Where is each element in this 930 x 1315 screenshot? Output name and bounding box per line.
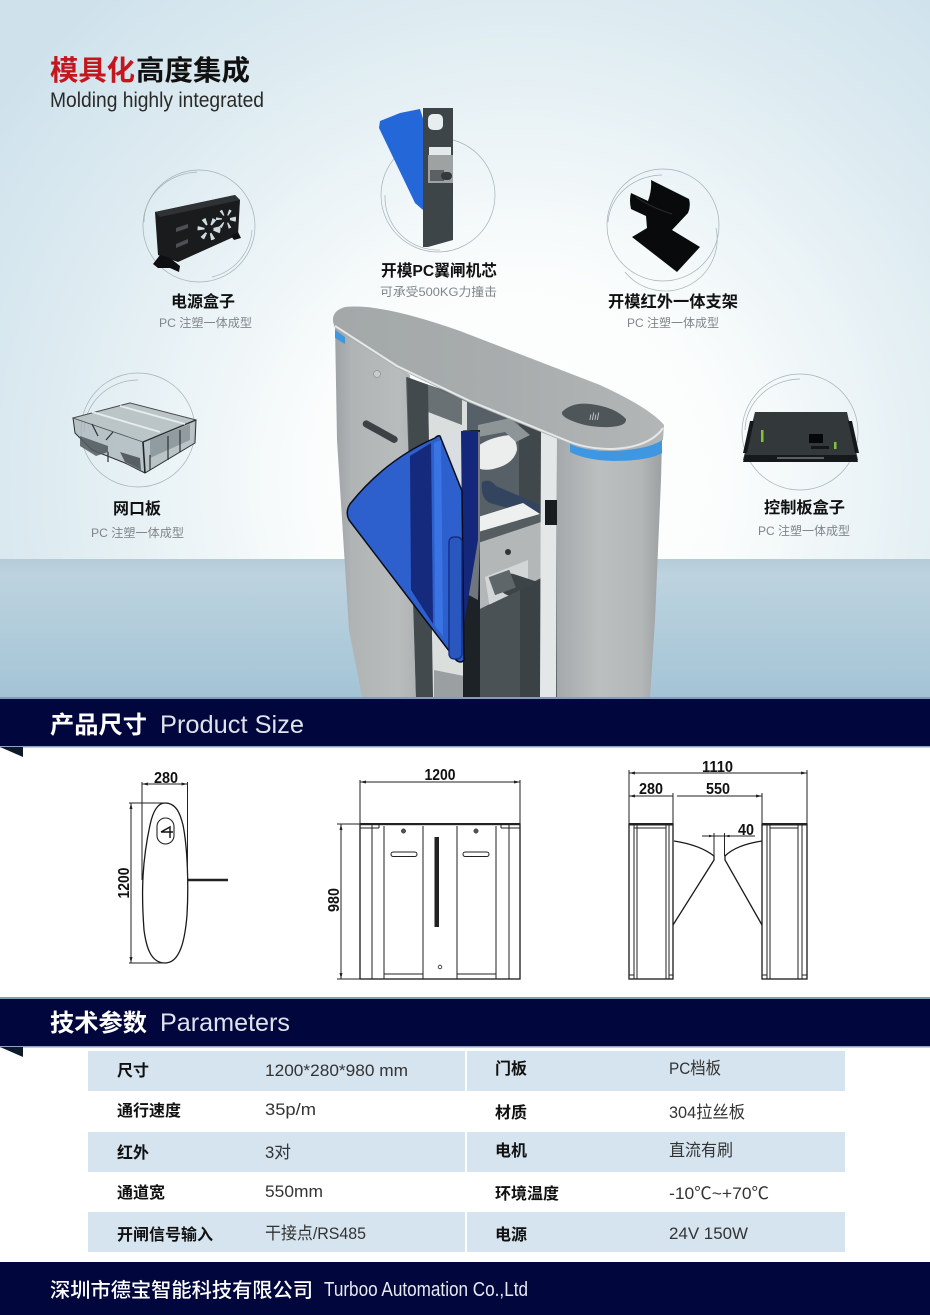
body screw (374, 370, 380, 378)
navy overlay on bar (461, 431, 478, 630)
table: parameters (88, 1051, 845, 1252)
icon: power box circle (143, 170, 255, 282)
heading: product size (50, 711, 304, 739)
label: network board (91, 500, 184, 540)
icon: power box (153, 195, 241, 272)
row: speed (117, 1100, 745, 1122)
translucent wing top (440, 430, 480, 600)
row: infrared: 3对 (265, 1143, 291, 1162)
row: size: 1200*280*980 mm (265, 1061, 408, 1080)
row: infrared: 电机 (495, 1142, 527, 1160)
upper strut (478, 418, 530, 442)
blue light strip left (335, 330, 345, 344)
reader panel (562, 404, 626, 427)
heading: parameters: 技术参数 (50, 1009, 147, 1037)
label: control box: 控制板盒子 (764, 498, 845, 517)
right body (556, 430, 662, 697)
row: channel width (117, 1182, 769, 1203)
top cap (333, 306, 664, 451)
right white strip (540, 432, 557, 697)
row: speed: 材质 (495, 1103, 527, 1122)
row: signal and power (117, 1224, 748, 1244)
lower interior dark (520, 580, 541, 697)
component: infrared bracket (607, 169, 738, 330)
blue flap wing (347, 436, 464, 662)
row: channel width: 通道宽 (117, 1183, 165, 1202)
interior opening (406, 377, 557, 697)
row: infrared (117, 1141, 733, 1162)
upper mechanism (428, 385, 462, 425)
company name: 深圳市德宝智能科技有限公司 (50, 1279, 313, 1302)
icon: bracket (630, 180, 700, 272)
title heading: 高度集成 (136, 55, 250, 86)
band: product size (0, 697, 930, 757)
subtitle: Molding highly integrated (50, 89, 264, 112)
label: network board: PC 注塑一体成型 (91, 525, 184, 540)
heading: parameters (50, 1009, 290, 1037)
drawing: front elevation (326, 767, 520, 979)
background: floor (0, 559, 930, 698)
component: flap wing core (379, 108, 497, 299)
dimension: 1110: 1110 (702, 759, 733, 776)
row: speed: 通行速度 (117, 1101, 181, 1120)
dark crossbar (478, 514, 541, 543)
label: control box: PC 注塑一体成型 (758, 523, 850, 538)
row: signal and power: 开闸信号输入 (117, 1225, 213, 1244)
dimension: 40: 40 (738, 822, 754, 839)
label: bracket: 开模红外一体支架 (608, 292, 738, 311)
label: wing core: 可承受500KG力撞击 (380, 284, 497, 299)
rear blue slot (482, 481, 540, 517)
row: speed: 35p/m (265, 1100, 316, 1119)
drawing: plan view (629, 759, 807, 979)
icon: wing core circle (381, 138, 495, 252)
label: power box: 电源盒子 (171, 292, 235, 311)
row: signal and power: 电源 (495, 1226, 527, 1244)
interior left dark strip (407, 377, 433, 697)
label: control box (758, 498, 850, 538)
row: size: 门板 (495, 1060, 527, 1078)
company name: Turboo Automation Co.,Ltd (324, 1279, 528, 1301)
dimension: 280: 280 (154, 770, 178, 787)
icon: network board (73, 403, 196, 473)
label: power box (159, 292, 252, 330)
body slot (361, 419, 399, 444)
footer band (0, 1262, 930, 1315)
dimension: 980: 980 (326, 888, 343, 912)
row: infrared: 直流有刷 (669, 1141, 733, 1160)
row: channel width: 550mm (265, 1182, 323, 1201)
company name (50, 1279, 528, 1302)
lower gray panel (434, 670, 464, 697)
label: bracket: PC 注塑一体成型 (627, 315, 719, 330)
motor (485, 549, 544, 609)
row: size: PC档板 (669, 1059, 721, 1078)
label: network board: 网口板 (113, 500, 161, 518)
interior right dark zone (519, 420, 541, 697)
label: wing core (380, 262, 497, 299)
title heading: 模具化 (50, 55, 135, 86)
row: channel width: 环境温度 (495, 1184, 559, 1203)
interior light panel (428, 385, 467, 697)
blue light strip right (570, 440, 662, 461)
dimension: 1200 vertical: 1200 (116, 867, 133, 898)
row: signal and power: 干接点/RS485 (265, 1224, 366, 1243)
label: bracket (608, 292, 738, 330)
rear white oval (478, 435, 517, 470)
icon: control box circle (742, 374, 858, 490)
reader panel: ılıl (589, 412, 600, 423)
left body (335, 325, 420, 697)
drawing: side top view (116, 770, 228, 963)
component: control board box (742, 374, 859, 538)
motor plate (478, 522, 541, 610)
row: signal and power: 24V 150W (669, 1224, 748, 1243)
row: channel width: -10℃~+70℃ (669, 1184, 769, 1203)
component: network board (73, 373, 196, 540)
lower interior (478, 580, 541, 697)
dimension: 1200: 1200 (424, 767, 456, 784)
heading: product size: Product Size (160, 711, 304, 739)
row: speed: 304拉丝板 (669, 1103, 745, 1122)
icon: wing core (379, 108, 453, 247)
row: infrared: 红外 (117, 1143, 149, 1162)
icon: bracket circle (607, 169, 719, 291)
dimension: 550: 550 (706, 781, 730, 798)
black block (545, 500, 557, 525)
dark center bar (463, 430, 480, 697)
band: parameters (0, 997, 930, 1057)
white crossbar (478, 503, 540, 532)
label: power box: PC 注塑一体成型 (159, 315, 252, 330)
background: gradient sky (0, 0, 930, 560)
dimension: 280: 280 (639, 781, 663, 798)
row: size: 尺寸 (117, 1061, 149, 1080)
component: power box (143, 170, 255, 330)
row: size (117, 1059, 721, 1080)
title heading (50, 55, 250, 86)
label: wing core: 开模PC翼闸机芯 (381, 262, 497, 280)
icon: network board circle (81, 373, 195, 487)
icon: control box (743, 412, 859, 462)
heading: parameters: Parameters (160, 1009, 290, 1037)
main product: turnstile cutaway (333, 306, 664, 697)
heading: product size: 产品尺寸 (50, 712, 147, 739)
